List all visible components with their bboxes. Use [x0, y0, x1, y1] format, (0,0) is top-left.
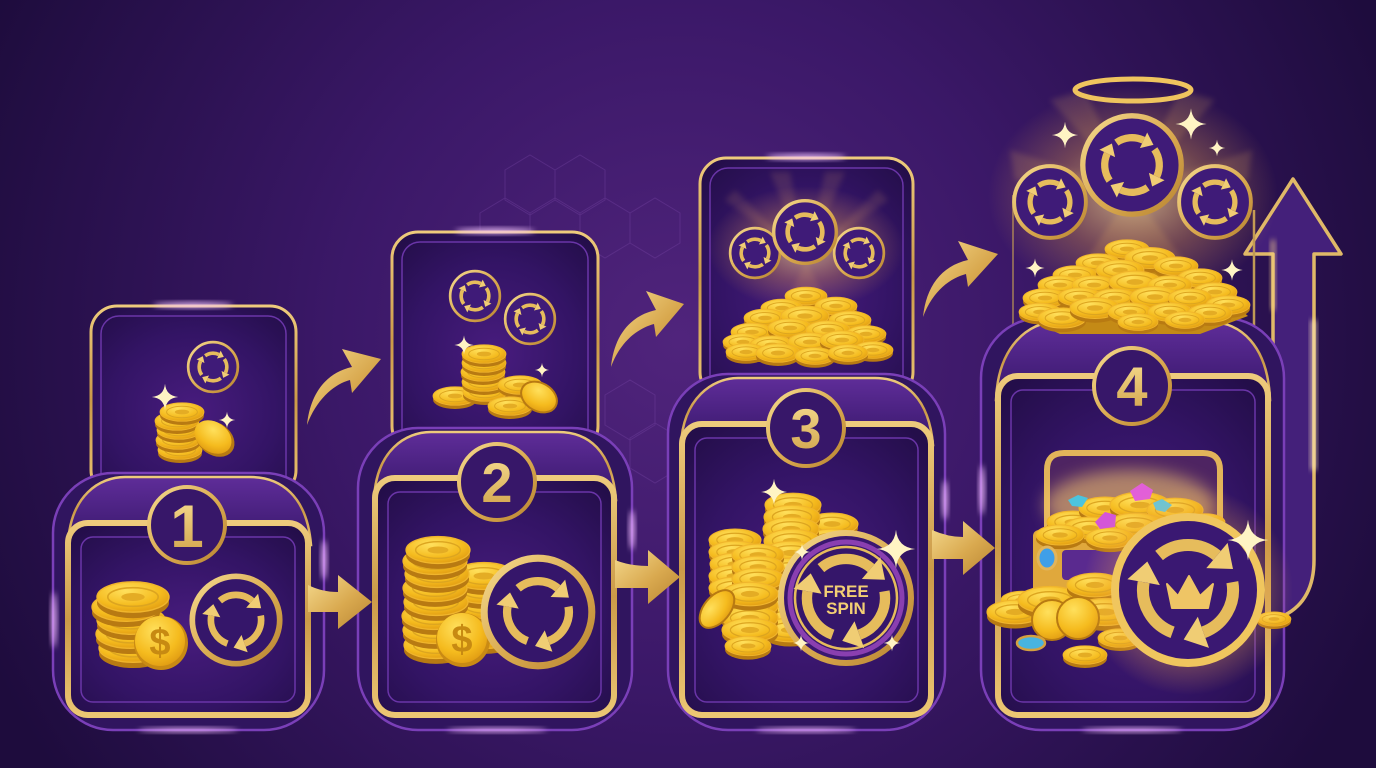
halo [1075, 79, 1191, 101]
icon: tall coin stack: $ [451, 619, 473, 661]
panel: step 3 main [682, 424, 931, 715]
badge 4: 4 [1116, 355, 1148, 418]
icon: spilled coins [987, 573, 1291, 668]
big up arrow [1245, 179, 1341, 615]
outer outline [668, 374, 945, 730]
icon: coin stacks [693, 479, 858, 660]
panel: step 3 top [700, 154, 913, 398]
sparkle [1228, 520, 1268, 560]
panel: step 2 top [392, 228, 598, 452]
glow [988, 85, 1278, 305]
icon: crown spin token [1115, 517, 1261, 663]
curved arrow 3 [923, 241, 998, 317]
outer outline [981, 318, 1284, 730]
lid [374, 432, 616, 500]
icon: treasure chest [1033, 453, 1225, 600]
lid [996, 322, 1270, 400]
glow: crown token [1083, 485, 1293, 695]
outer outline [358, 428, 632, 730]
icon: coins [433, 335, 562, 419]
arrow 2 to 3 [615, 550, 680, 604]
badge 2 [459, 444, 535, 520]
icon: tall coin stack [402, 537, 518, 667]
free spin badge: SPIN [826, 599, 866, 618]
free spin badge [781, 530, 915, 663]
curved arrow 2 [611, 291, 684, 367]
step 4 [981, 79, 1293, 730]
panel: step 4 top lines [1013, 195, 1254, 330]
icon: coin pile [723, 287, 893, 368]
icon: large coin pile [1019, 240, 1250, 334]
panel: step 2 main [375, 478, 614, 715]
icon: three big spin tokens [1014, 108, 1251, 281]
arrow 1 to 2 [308, 575, 372, 629]
badge 1 [149, 487, 225, 563]
icon: spin token [484, 558, 592, 666]
icon: small spin token [188, 342, 238, 392]
icon: crown [1167, 576, 1213, 608]
icon: coin stack: $ [149, 622, 171, 664]
free spin badge: FREE [823, 582, 869, 601]
step 1 [53, 302, 324, 730]
panel: step 1 top [91, 302, 296, 496]
badge 3 [768, 390, 844, 466]
curved arrow 1 [307, 349, 381, 425]
icon: two spin tokens [450, 271, 555, 344]
glow [708, 172, 904, 330]
hexagon pattern [480, 155, 680, 483]
badge 4 [1094, 348, 1170, 424]
panel: step 1 main [68, 523, 308, 715]
arrow 3 to 4 [932, 521, 995, 575]
light accents [52, 465, 1182, 732]
lid [681, 378, 933, 445]
badge 1: 1 [170, 493, 204, 560]
step 3 [668, 154, 945, 730]
gems [1038, 483, 1172, 569]
panel: step 4 main [998, 376, 1268, 715]
badge 3: 3 [790, 397, 822, 460]
icon: small coin stack [152, 384, 241, 464]
step 2 [358, 228, 632, 730]
lid [68, 477, 311, 545]
badge 2: 2 [481, 451, 513, 514]
icon: three spin tokens [730, 201, 884, 278]
outer outline [53, 473, 324, 730]
icon: spin token [192, 576, 280, 664]
icon: coin stack [92, 582, 188, 670]
